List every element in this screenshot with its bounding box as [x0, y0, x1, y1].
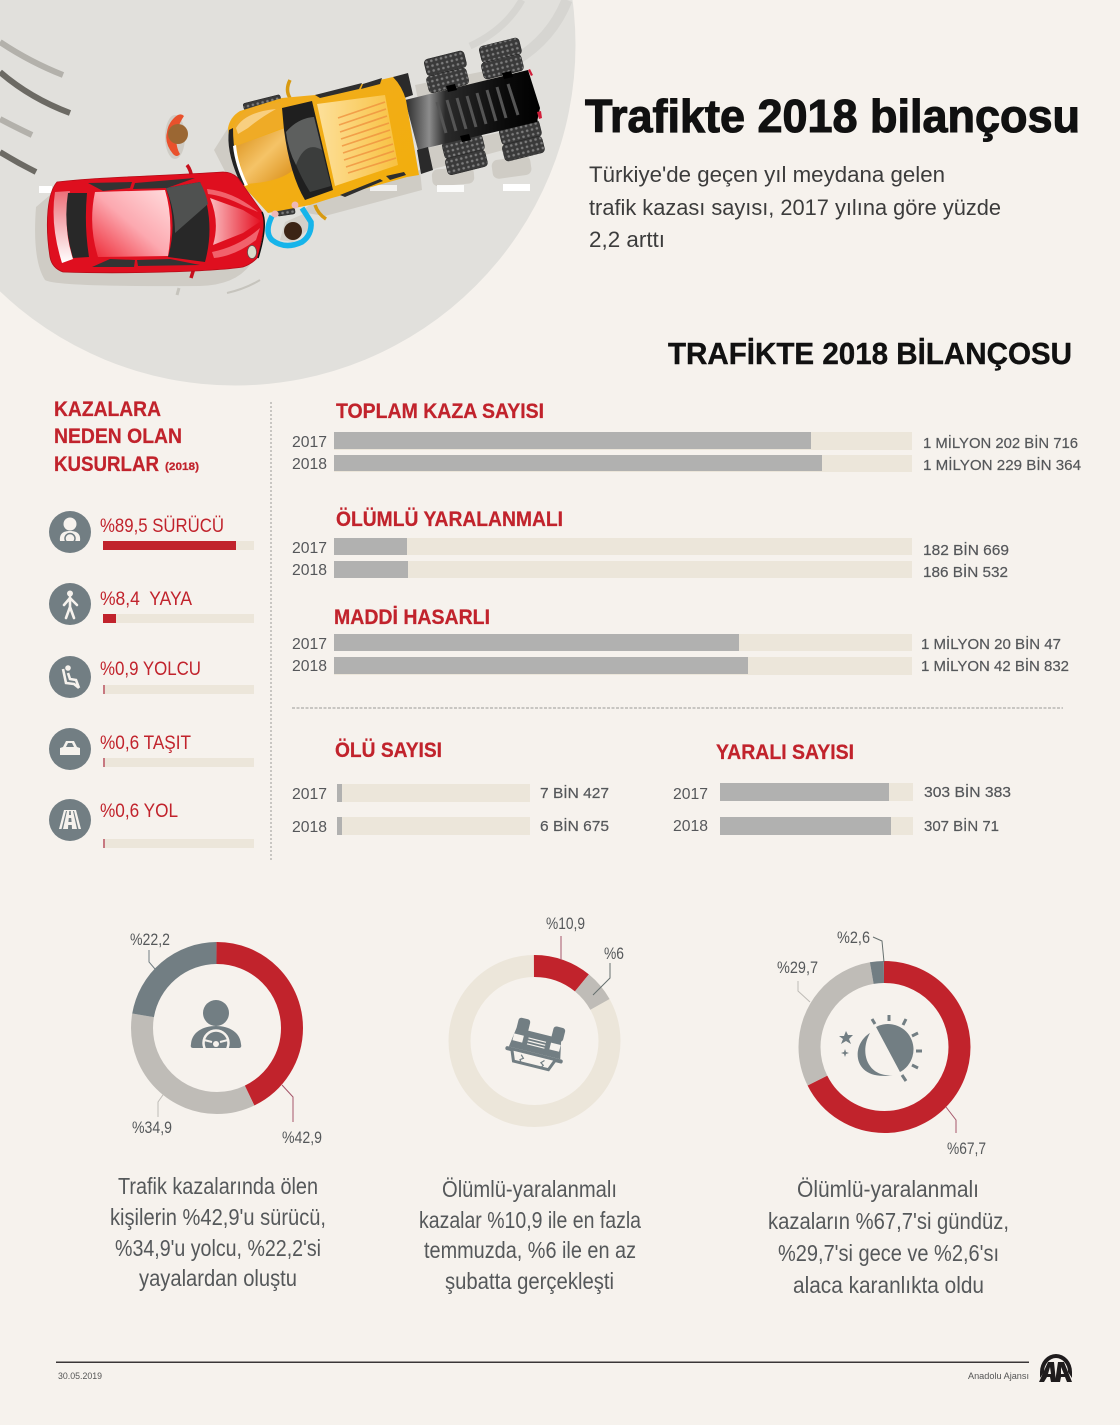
donut chart: victims: [142, 953, 292, 1103]
caption: victims: [110, 1173, 326, 1291]
chart: material damage: 1 MİLYON 42 BİN 832: [921, 657, 1069, 675]
icon: sun and moon: [839, 1015, 922, 1081]
truck: [228, 37, 545, 219]
cause: driver: %89,5 SÜRÜCÜ: [100, 516, 224, 537]
caption: victims: Trafik kazalarında ölen: [118, 1173, 318, 1199]
road circle: [0, 0, 576, 386]
caption: months: Ölümlü-yaralanmalı: [442, 1176, 617, 1202]
person: orange shirt: [166, 114, 188, 156]
intro text: Türkiye'de geçen yıl meydana gelen: [589, 162, 945, 187]
chart: material damage: 1 MİLYON 20 BİN 47: [921, 635, 1061, 653]
cause: driver: [49, 511, 254, 553]
vehicle shadows: [35, 68, 540, 286]
donut labels and leader lines: %29,7: [777, 958, 818, 977]
donut labels and leader lines: %10,9: [546, 914, 585, 933]
chart: injured: YARALI SAYISI: [716, 741, 854, 764]
road dashes: [39, 184, 530, 193]
truck wheels: [243, 37, 545, 216]
cause: road: %0,6 YOL: [100, 801, 178, 822]
donut panel: victims: [110, 930, 326, 1291]
illustration: truck and car collision: [0, 0, 576, 386]
caption: time of day: [768, 1176, 1009, 1298]
cause: road: [49, 799, 254, 848]
intro text: 2,2 arttı: [589, 227, 665, 252]
caption: time of day: Ölümlü-yaralanmalı: [797, 1176, 979, 1202]
car mirrors: [187, 165, 195, 278]
panel: causes of accidents: [49, 398, 254, 848]
caption: victims: %34,9'u yolcu, %22,2'si: [115, 1235, 321, 1261]
caption: months: şubatta gerçekleşti: [445, 1268, 614, 1294]
chart: injured: 2017: [673, 786, 708, 803]
chart: injured: 307 BİN 71: [924, 817, 999, 835]
donut labels and leader lines: %42,9: [282, 1128, 322, 1147]
caption: months: kazalar %10,9 ile en fazla: [419, 1207, 641, 1233]
chart: injured: [673, 741, 1011, 835]
icon: driver: [191, 1000, 241, 1056]
car roof: [92, 190, 170, 257]
truck windshield: [282, 101, 333, 200]
cause: vehicle: [49, 728, 254, 770]
causes heading: KAZALARA: [54, 398, 161, 421]
donut labels and leader lines: %34,9: [132, 1118, 172, 1137]
chart: fatal-injury accidents: [292, 508, 1009, 581]
person: blue shirt: [268, 202, 314, 246]
chart: total accidents: 1 MİLYON 229 BİN 364: [923, 456, 1081, 474]
chart: fatal-injury accidents: ÖLÜMLÜ YARALANMALI: [336, 508, 563, 531]
red car: [47, 165, 264, 278]
footer: [56, 1354, 1072, 1382]
chart: deaths: 2018: [292, 819, 327, 836]
donut labels and leader lines: [130, 930, 322, 1147]
title: Trafikte 2018 bilançosu: [585, 90, 1080, 142]
car windshield: [166, 182, 209, 262]
chart: material damage: 2017: [292, 636, 327, 653]
caption: months: temmuzda, %6 ile en az: [424, 1237, 636, 1263]
chart: material damage: 2018: [292, 658, 327, 675]
donut labels and leader lines: %67,7: [947, 1139, 986, 1158]
car rear window: [66, 193, 89, 258]
tire skid marks: [0, 0, 567, 295]
chart: deaths: 6 BİN 675: [540, 817, 609, 835]
truck side windows: [315, 78, 406, 197]
chart: total accidents: 2017: [292, 434, 327, 451]
logo: Anadolu Agency: [1039, 1354, 1072, 1382]
chart: injured: 303 BİN 383: [924, 783, 1011, 801]
donut chart: time of day: [810, 972, 960, 1122]
donut labels and leader lines: [546, 914, 624, 995]
chart: total accidents: TOPLAM KAZA SAYISI: [336, 400, 544, 423]
donut panel: months: [419, 914, 641, 1294]
donut labels and leader lines: %22,2: [130, 930, 170, 949]
car rear panel: [54, 191, 73, 263]
causes heading: (2018): [165, 461, 199, 473]
cause: vehicle: %0,6 TAŞIT: [100, 733, 191, 754]
chart: fatal-injury accidents: 182 BİN 669: [923, 541, 1009, 559]
date: 30.05.2019: [58, 1371, 102, 1381]
chart: material damage: MADDİ HASARLI: [334, 606, 490, 629]
intro text: trafik kazası sayısı, 2017 yılına göre yüzde: [589, 195, 1001, 220]
chart: injured: 2018: [673, 818, 708, 835]
cause: pedestrian: %8,4 YAYA: [100, 589, 192, 610]
caption: victims: yayalardan oluştu: [139, 1265, 297, 1291]
donut chart: months: [460, 966, 610, 1116]
causes heading: [54, 398, 199, 476]
caption: time of day: alaca karanlıkta oldu: [793, 1272, 984, 1298]
truck cab: [228, 77, 419, 213]
cause: passenger: %0,9 YOLCU: [100, 659, 201, 680]
chart: deaths: 2017: [292, 786, 327, 803]
donut panel: time of day: [768, 928, 1009, 1298]
chart: fatal-injury accidents: 186 BİN 532: [923, 563, 1008, 581]
truck roof: [317, 95, 398, 186]
caption: time of day: %29,7'si gece ve %2,6'sı: [778, 1240, 999, 1266]
car side windows: [88, 178, 200, 267]
causes heading: NEDEN OLAN: [54, 425, 182, 448]
donut labels and leader lines: %2,6: [837, 928, 870, 947]
source: Anadolu Ajansı: [968, 1371, 1029, 1381]
caption: months: [419, 1176, 641, 1294]
caption: victims: kişilerin %42,9'u sürücü,: [110, 1204, 326, 1230]
chart: fatal-injury accidents: 2017: [292, 540, 327, 557]
section heading: TRAFİKTE 2018 BİLANÇOSU: [668, 336, 1072, 371]
cause: pedestrian: [49, 583, 254, 625]
truck mirrors: [288, 80, 326, 219]
car hood: [210, 198, 261, 245]
causes heading: KUSURLAR: [54, 453, 159, 476]
chart: total accidents: 1 MİLYON 202 BİN 716: [923, 434, 1078, 452]
car body: [47, 172, 264, 273]
chart: deaths: 7 BİN 427: [540, 784, 609, 802]
chart: fatal-injury accidents: 2018: [292, 562, 327, 579]
icon: overturned truck: [503, 1016, 571, 1073]
chart: deaths: ÖLÜ SAYISI: [335, 739, 442, 762]
truck chassis: [405, 70, 540, 150]
chart: material damage: [292, 606, 1069, 675]
cause: passenger: [49, 656, 254, 698]
chart: total accidents: 2018: [292, 456, 327, 473]
donut labels and leader lines: %6: [604, 944, 624, 963]
donut labels and leader lines: [777, 928, 986, 1158]
chart: total accidents: [292, 400, 1081, 474]
intro text: [589, 162, 1001, 252]
caption: time of day: kazaların %67,7'si gündüz,: [768, 1208, 1009, 1234]
car headlamp: [248, 246, 256, 258]
chart: deaths: [292, 739, 609, 836]
